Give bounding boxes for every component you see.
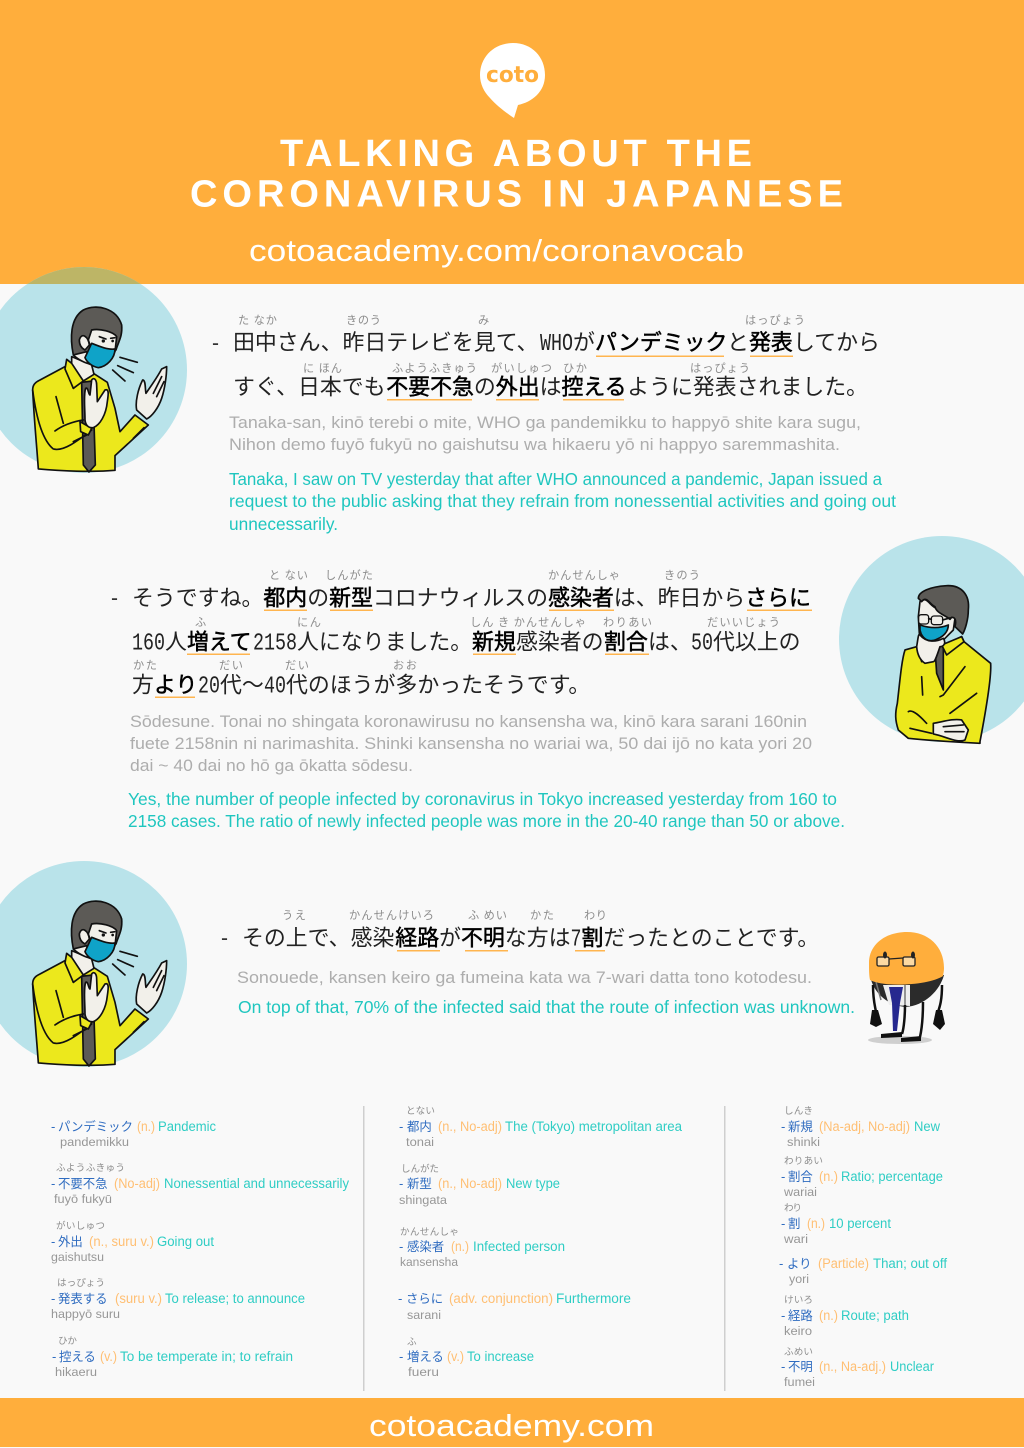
japanese sentence: 割 [582,922,603,952]
romaji: fuete 2158nin ni narimashita. Shinki kansensha no wariai wa, 50 dai ijō no kata yori 20 [130,734,812,753]
japanese sentence line 1: WHO [540,331,573,358]
vocab: tonai: - [399,1119,403,1134]
furigana line 1: しんがた [325,567,373,583]
vocab: kansensha [399,1224,565,1269]
panel: dialogue 2 [111,567,845,831]
vocab: yori: Than; out off [873,1256,947,1271]
japanese sentence line 2: 新規 [472,626,516,656]
japanese sentence line 1: は、昨日から [614,582,745,612]
vocab: fumei: 不明 [788,1357,813,1375]
panel: dialogue 1 [212,312,896,534]
vocab: fueru: 増える [407,1347,444,1365]
vocab: happyo suru: 発表する [58,1289,108,1307]
vocab: kansensha: (n.) [451,1239,469,1254]
vocab: wariai: 割合 [788,1167,813,1185]
english translation: 2158 cases. The ratio of newly infected people was more in the 20-40 range than 50 or above. [128,811,845,831]
japanese sentence line 2 [233,370,868,402]
vocab: shingata: - [399,1176,403,1191]
japanese sentence line 1: 田中さん、昨日テレビを見て、 [233,326,538,357]
furigana line 2: しん き かんせんしゃ [470,614,586,630]
header banner [0,0,1024,284]
japanese sentence line 2: 代以上の [713,626,801,656]
vocab: wari: 割 [788,1214,800,1232]
vocab: yori: (Particle) [818,1256,869,1271]
vocab: keiro: けいろ [784,1292,813,1306]
japanese sentence line 2: 50 [691,630,713,658]
furigana line 1: み [478,312,489,328]
vocab: wari [781,1200,891,1246]
vocab: fuyo fukyu: (No-adj) [114,1176,160,1191]
japanese sentence line 2: 控える [562,370,627,402]
furigana line 3 [133,657,417,673]
furigana line 2: ふ [195,614,206,630]
vocab: gaishutsu: gaishutsu [51,1250,104,1264]
japanese sentence line 3: より [154,668,197,700]
vocab: sarani: (adv. conjunction) [449,1291,553,1306]
japanese sentence: - [221,925,228,950]
romaji [130,712,812,775]
vocab: wari: wari [783,1232,808,1246]
vocab: gaishutsu: - [51,1234,55,1249]
icon: coto logo speech bubble: coto [486,63,539,88]
vocab: fumei: (n., Na-adj.) [819,1359,886,1374]
vocab: fueru: fueru [408,1365,439,1379]
vocab: shingata: (n., No-adj) [438,1176,502,1191]
furigana line 1: た なか [238,312,277,328]
vocab: tonai: とない [406,1103,435,1117]
japanese sentence line 1: と [727,326,749,357]
icon: coto mascot character [868,932,945,1044]
vocab: shingata [399,1161,560,1207]
furigana line 2: がいしゅつ [491,360,552,376]
vocab: happyo suru [51,1275,305,1321]
furigana line 1: きのう [664,567,700,583]
japanese sentence line 1: さらに [745,582,811,612]
japanese sentence line 2: 外出 [496,370,540,402]
japanese sentence line 3: 代のほうが多かったそうです。 [286,668,590,700]
vocab: kansensha: Infected person [473,1239,565,1254]
vocab: fuyo fukyu: 不要不急 [58,1174,108,1192]
vocab: fueru: (v.) [447,1349,464,1364]
title: CORONAVIRUS IN JAPANESE [190,174,843,216]
japanese sentence line 1: - [111,585,118,610]
vocab: yori [779,1254,947,1286]
furigana line 1: きのう [346,312,381,328]
japanese sentence [221,922,819,954]
japanese sentence line 2: 感染者の [516,626,604,656]
japanese sentence line 2: 2158 [253,630,297,658]
japanese sentence line 1: が [573,326,595,357]
panel: vocabulary column 1 [51,1117,349,1379]
vocab: hikaeru: hikaeru [55,1365,97,1379]
vocab: tonai: tonai [406,1135,434,1149]
vocab: keiro: (n.) [819,1308,838,1323]
furigana line 1 [269,567,700,583]
furigana: わり [584,907,607,923]
english translation [128,789,845,831]
furigana line 2 [195,614,780,630]
vocab: fueru [399,1334,534,1379]
japanese sentence line 1: 発表 [749,326,793,357]
vocab: happyo suru: To release; to announce [165,1291,305,1306]
vocab: pandemic: - [51,1119,55,1134]
vocab: gaishutsu: 外出 [58,1232,83,1250]
romaji [229,413,861,454]
furigana [282,907,607,923]
vocab: wariai: - [781,1169,785,1184]
vocab: pandemic [51,1117,216,1149]
furigana line 2: ふようふきゅう [392,360,477,376]
japanese sentence line 1 [212,326,880,358]
vocab: hikaeru: 控える [59,1347,96,1365]
vocab: shingata: New type [506,1176,560,1191]
vocab: happyo suru: はっぴょう [57,1275,105,1289]
vocab: fueru: - [399,1349,403,1364]
english translation: On top of that, 70% of the infected said that the route of infection was unknown. [238,997,855,1017]
japanese sentence line 1: してから [793,326,880,357]
furigana line 2: だいいじょう [707,614,780,630]
japanese sentence line 1: コロナウィルスの [373,582,548,612]
japanese sentence line 2: すぐ、日本でも [233,370,386,402]
vocab: keiro: - [781,1308,785,1323]
icon: coto logo speech bubble [480,43,545,118]
vocab: fumei [781,1344,935,1389]
vocab: kansensha: かんせんしゃ [400,1224,459,1238]
romaji: Sōdesune. Tonai no shingata koronawirusu no kansensha wa, kinō kara sarani 160nin [130,712,807,731]
furigana line 1: かんせんしゃ [548,567,620,583]
furigana line 3: だい [219,657,243,673]
furigana line 1: はっぴょう [745,312,805,328]
vocab: happyo suru: - [51,1291,55,1306]
vocab: fumei: fumei [784,1375,815,1389]
japanese sentence: だったとのことです。 [603,922,819,952]
japanese sentence line 2: 人 [165,626,187,656]
japanese sentence line 3: 代〜 [220,668,264,700]
japanese sentence line 2: の [474,370,496,402]
japanese sentence line 2: ように発表されました。 [627,370,868,402]
vocab: shingata: shingata [399,1193,447,1207]
furigana: ふ めい [468,907,507,923]
furigana line 2: はっぴょう [690,360,750,376]
vocab: shingata: 新型 [407,1174,432,1192]
vocab: sarani [398,1289,631,1322]
vocab: fumei: Unclear [890,1359,935,1374]
vocab: sarani: sarani [407,1308,441,1322]
furigana line 3: おお [393,657,417,673]
vocab: fueru: To increase [467,1349,534,1364]
english translation: request to the public asking that they refrain from nonessential activities and going out [229,491,896,511]
japanese sentence line 1: そうですね。 [132,582,263,612]
japanese sentence: 経路 [395,922,439,952]
vocab: wari: (n.) [807,1216,825,1231]
vocab: keiro: keiro [784,1324,812,1338]
romaji: Tanaka-san, kinō terebi o mite, WHO ga pandemikku to happyō shite kara sugu, [229,413,861,432]
english translation: unnecessarily. [229,514,338,534]
panel: vocabulary column 2 [398,1103,683,1379]
japanese sentence line 1: 感染者 [548,582,614,612]
vocab: pandemic: pandemikku [60,1135,129,1149]
furigana line 2: ひか [563,360,587,376]
vocab: shinki: New [914,1119,940,1134]
japanese sentence line 1: の [307,582,329,612]
illustration: masked man coughing, top [0,267,187,473]
url: cotoacademy.com/coronavocab [249,233,744,268]
vocab: yori: yori [789,1272,809,1286]
vocab: keiro [781,1292,909,1338]
vocab: keiro: 経路 [788,1306,813,1324]
japanese sentence line 1: 新型 [329,582,373,612]
furigana line 2: に ほん [303,360,342,376]
japanese sentence line 2: 増えて [187,626,252,656]
vocab: yori: - [779,1256,783,1271]
vocab: hikaeru: To be temperate in; to refrain [120,1349,293,1364]
japanese sentence line 2 [132,626,801,658]
title [190,133,843,216]
japanese sentence line 2: 割合 [604,626,648,656]
vocab: shinki [781,1103,940,1149]
furigana: かた [530,907,554,923]
vocab: pandemic: Pandemic [158,1119,216,1134]
vocab: shinki: - [781,1119,785,1134]
vocab: fueru: ふ [407,1334,417,1348]
vocab: tonai: (n., No-adj) [438,1119,502,1134]
vocab: hikaeru: ひか [58,1333,77,1347]
japanese sentence: 不明 [461,922,505,952]
vocab: fuyo fukyu: Nonessential and unnecessarily [164,1176,349,1191]
vocab: hikaeru: - [52,1349,56,1364]
vocab: happyo suru: (suru v.) [115,1291,162,1306]
vocab: sarani: Furthermore [556,1291,631,1306]
panel: dialogue 3 [221,907,855,1017]
vocab: kansensha: kansensha [400,1255,458,1269]
japanese sentence line 1 [111,582,812,612]
vocab: gaishutsu [51,1218,214,1264]
vocab: happyo suru: happyō suru [51,1307,120,1321]
vocab: sarani: さらに [406,1289,443,1307]
vocab: wariai [781,1153,943,1199]
japanese sentence line 2: は [540,370,562,402]
vocab: shinki: しんき [784,1103,813,1117]
japanese sentence: 7 [570,926,582,954]
japanese sentence line 2: 人になりました。 [297,626,472,656]
vocab: wari: わり [784,1200,802,1214]
romaji: Nihon demo fuyō fukyū no gaishutsu wa hikaeru yō ni happyo saremmashita. [229,435,840,454]
illustration: thinking man with glasses [839,536,1024,743]
vocab: wariai: Ratio; percentage [841,1169,943,1184]
vocab: gaishutsu: がいしゅつ [56,1218,105,1232]
vocab: kansensha: - [399,1239,403,1254]
furigana line 3: だい [285,657,309,673]
vocab: wariai: わりあい [784,1153,823,1167]
vocab: kansensha: 感染者 [407,1237,444,1255]
vocab: pandemic: パンデミック [58,1117,133,1135]
vocab: pandemic: (n.) [137,1119,155,1134]
footer banner [0,1398,1024,1447]
vocab: shinki: shinki [787,1135,820,1149]
vocab: wari: 10 percent [829,1216,891,1231]
vocab: tonai: 都内 [407,1117,432,1135]
vocab: fumei: ふめい [784,1344,813,1358]
japanese sentence line 2: 160 [132,630,165,658]
japanese sentence line 2: は、 [648,626,692,656]
vocab: fuyo fukyu: fuyō fukyū [54,1192,112,1206]
vocab: fumei: - [781,1359,785,1374]
illustration: masked man coughing, bottom [0,861,187,1067]
english translation [229,469,896,534]
footer banner: cotoacademy.com [369,1408,654,1443]
japanese sentence line 1: 都内 [263,582,307,612]
japanese sentence: その上で、感染 [242,922,394,952]
romaji: Sonouede, kansen keiro ga fumeina kata wa 7-wari datta tono kotodesu. [237,968,812,987]
vocab: wariai: wariai [783,1185,817,1199]
vocab: fuyo fukyu: ふようふきゅう [56,1160,125,1174]
vocab: wari: - [781,1216,785,1231]
japanese sentence line 3 [132,668,590,700]
furigana line 2: わりあい [603,614,652,630]
japanese sentence: な方は [505,922,570,952]
vocab: fuyo fukyu [51,1160,349,1206]
vocab: tonai [399,1103,683,1149]
english translation: Yes, the number of people infected by coronavirus in Tokyo increased yesterday from 160 to [128,789,837,809]
japanese sentence line 2: 不要不急 [386,370,474,402]
furigana: うえ [282,907,306,923]
furigana line 3: かた [133,657,157,673]
japanese sentence line 3: 方 [132,668,154,700]
vocab: shinki: 新規 [788,1117,813,1135]
vocab: hikaeru: (v.) [100,1349,117,1364]
vocab: tonai: The (Tokyo) metropolitan area [505,1119,683,1134]
vocab: hikaeru [52,1333,293,1379]
panel: vocabulary column 3 [779,1103,947,1389]
vocab: gaishutsu: Going out [157,1234,214,1249]
japanese sentence line 3: 40 [264,674,286,700]
vocab: shinki: (Na-adj, No-adj) [819,1119,910,1134]
vocab: wariai: (n.) [819,1169,838,1184]
japanese sentence: が [439,922,461,952]
vocab: fuyo fukyu: - [51,1176,55,1191]
romaji: dai ~ 40 dai no hō ga ōkatta sōdesu. [130,756,413,775]
japanese sentence line 1: - [212,330,219,355]
furigana line 2: にん [297,614,321,630]
english translation: Tanaka, I saw on TV yesterday that after WHO announced a pandemic, Japan issued a [229,469,882,489]
furigana line 2 [303,360,750,376]
vocab: keiro: Route; path [841,1308,909,1323]
furigana line 1: と ない [269,567,308,583]
title: TALKING ABOUT THE [280,133,752,175]
vocab: yori: より [787,1254,812,1272]
vocab: gaishutsu: (n., suru v.) [89,1234,154,1249]
furigana line 1 [238,312,805,328]
japanese sentence line 1: パンデミック [595,326,727,357]
japanese sentence line 3: 20 [198,674,220,700]
vocab: sarani: - [398,1291,402,1306]
furigana: かんせんけいろ [349,907,434,923]
vocab: shingata: しんがた [401,1161,439,1175]
